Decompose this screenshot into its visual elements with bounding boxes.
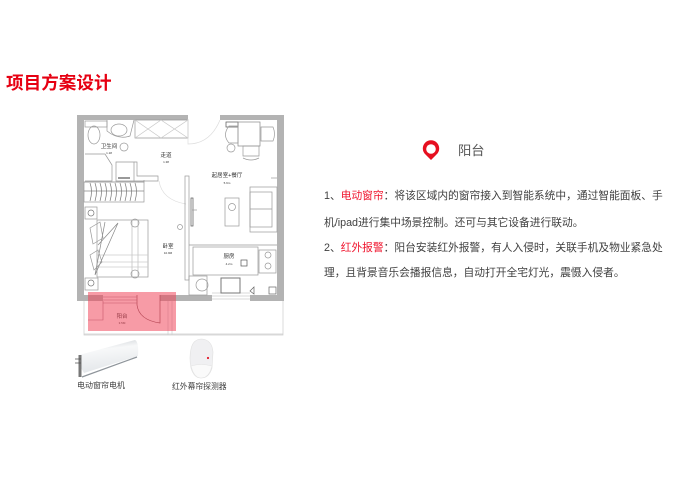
room labels: 1.38 [163,160,169,164]
icon: infrared detector [190,339,213,378]
balcony outline [84,293,283,335]
heading: balcony: 阳台 [458,143,485,158]
caption: infrared detector: 红外幕帘探测器 [172,382,227,391]
kitchen [189,245,277,295]
living room [159,119,277,280]
room labels: 卫生间 [101,142,117,150]
text block: features: 2、红外报警：阳台安装红外报警，有人入侵时，关联手机及物业紧急处 [324,242,663,254]
room labels [101,142,243,325]
room labels: 3.5M [119,321,126,325]
text block: features: 1、电动窗帘：将该区域内的窗帘接入到智能系统中，通过智能面板、手 [324,190,663,202]
text block: features [324,190,663,279]
room labels: 10.9M [164,251,173,255]
icon: curtain motor [75,340,138,377]
bathroom [84,120,188,182]
room labels: 阳台 [116,312,128,320]
room labels: 卧室 [162,242,174,250]
room labels: 走道 [160,151,172,159]
walls [77,115,284,301]
room labels: 起居室+餐厅 [212,171,243,179]
room labels: 1.18 [106,151,112,155]
title: 项目方案设计 [6,73,112,93]
bedroom [85,219,148,290]
room labels: 4.2m [226,262,233,266]
text block: features: 理，且背景音乐会播报信息，自动打开全宅灯光，震慑入侵者。 [324,267,625,279]
highlight: balcony [88,292,176,331]
room labels: 厨房 [223,252,235,260]
text block: features: 机/ipad进行集中场景控制。还可与其它设备进行联动。 [324,217,583,229]
icon: location pin [423,140,439,160]
room labels: 5.9m [224,181,231,185]
wardrobe [84,182,144,219]
caption: curtain motor: 电动窗帘电机 [77,381,125,390]
